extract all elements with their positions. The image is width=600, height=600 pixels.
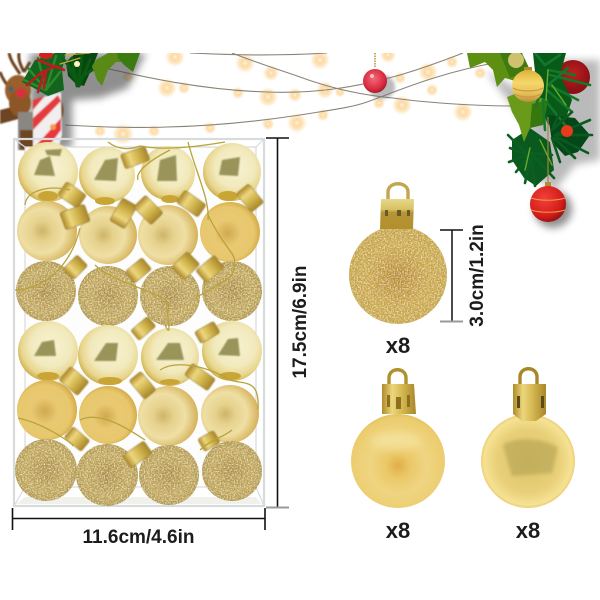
ornament: matte [351, 370, 445, 508]
product box with 24 ornaments [14, 139, 264, 506]
soft shadow [30, 53, 146, 148]
transparent box frame [14, 139, 264, 506]
small red bauble [561, 125, 573, 137]
ornament: glitter [349, 184, 447, 324]
shadow [485, 60, 600, 190]
label: diameter: 3.0cm/1.2in [467, 224, 488, 327]
dark pine masses [533, 53, 572, 125]
quantity: matte: x8 [386, 518, 410, 543]
row 2: matte ornaments [17, 201, 260, 265]
ornament caps [58, 146, 264, 468]
row 6: glitter ornaments [15, 439, 262, 506]
decoration: string lights [65, 46, 513, 146]
lower red bauble [530, 182, 566, 222]
decoration: holly and baubles, top right [467, 52, 600, 228]
dimension: box height [266, 138, 311, 508]
cap [513, 369, 546, 421]
hanging thread [547, 117, 549, 183]
ornament: shiny [481, 369, 575, 508]
row 4: shiny ornaments [18, 321, 262, 386]
label: height: 17.5cm/6.9in [290, 265, 311, 379]
decoration: reindeer, candy cane and holly, top left [0, 51, 146, 150]
cap [382, 370, 416, 414]
pine sprig [22, 51, 98, 96]
label: width: 11.6cm/4.6in [83, 527, 194, 548]
holly leaves [92, 53, 140, 86]
cap [380, 184, 414, 229]
holly leaves [467, 53, 516, 87]
light strings [65, 53, 513, 127]
dimension: ornament diameter [440, 224, 488, 327]
row 5: matte ornaments [17, 380, 259, 446]
quantity: glitter: x8 [386, 333, 410, 358]
row 3: glitter ornaments [16, 261, 262, 326]
reindeer [0, 53, 64, 150]
row 1: shiny ornaments [18, 142, 261, 205]
light glows [93, 46, 487, 146]
gold ribbon threads [15, 142, 258, 450]
quantity: shiny: x8 [516, 518, 540, 543]
gold bauble glow [508, 52, 524, 68]
decoration: red hanging bauble [363, 53, 395, 99]
candy cane [32, 92, 62, 150]
dark red bauble [560, 60, 590, 94]
pine needles [508, 53, 592, 186]
dimension: box width [12, 508, 265, 548]
gold bauble [512, 67, 544, 102]
